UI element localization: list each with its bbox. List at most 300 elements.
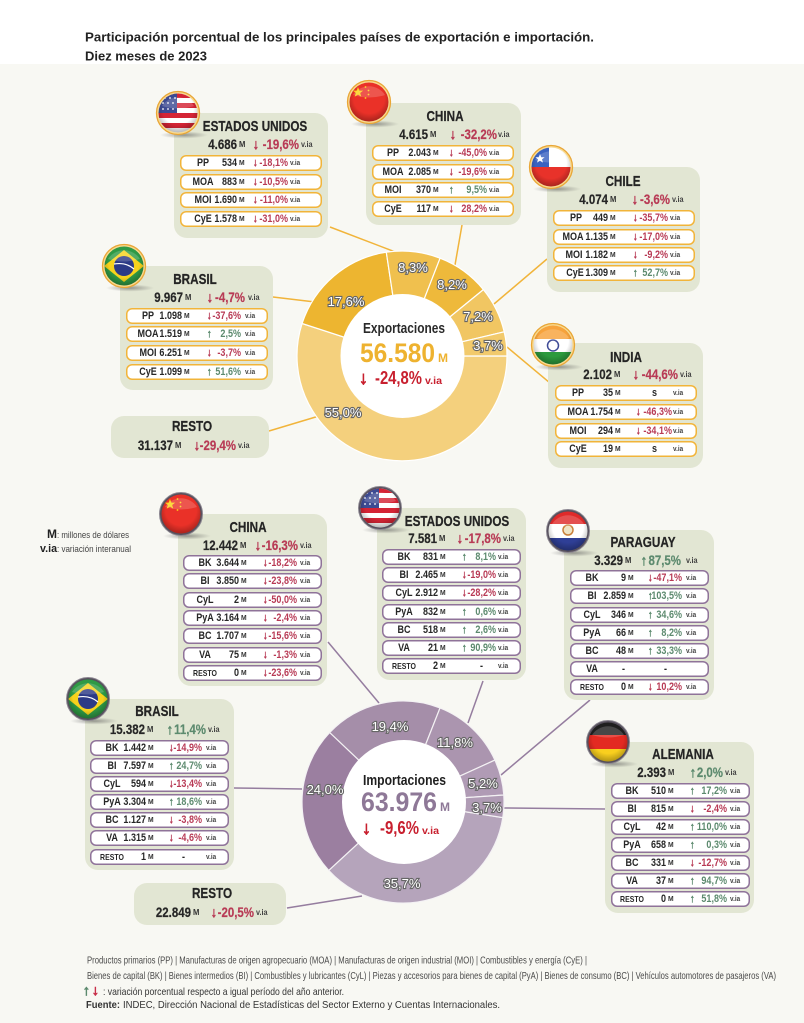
panel: imports China: 3.850 [216, 575, 239, 587]
panel: imports Alemania: ALEMANIA [652, 746, 714, 763]
panel: imports Estados Unidos: M [440, 607, 445, 616]
panel: imports Alemania: v.ia [730, 804, 740, 813]
panel: exports China: ↓ [450, 126, 456, 142]
panel: exports Chile: M [610, 194, 616, 204]
panel: imports Paraguay: M [628, 591, 633, 600]
panel: imports Alemania: VA [626, 875, 638, 887]
panel: exports Chile: 1.182 [585, 249, 608, 261]
panel: imports China: VA [199, 649, 211, 661]
panel: exports Brasil: PP [142, 310, 154, 322]
footer notes [83, 954, 776, 1011]
panel: imports China: BK [198, 557, 212, 569]
panel: imports Estados Unidos: v.ia [498, 570, 508, 579]
footer notes: Productos primarios (PP) | Manufacturas de origen agropecuario (MOA) | Manufacturas de origen industrial (MOI) | Combustibles y energía (CyE) | [87, 954, 587, 966]
panel: imports Alemania: 815 [651, 803, 666, 815]
panel: exports China: 2.085 [408, 166, 431, 178]
legend: units: : millones de dólares [57, 530, 129, 541]
panel: imports Paraguay: M [628, 646, 633, 655]
panel: imports Paraguay: BC [585, 645, 599, 657]
panel: imports Paraguay: - [664, 663, 667, 675]
panel: imports Estados Unidos: 21 [428, 642, 438, 654]
panel: imports Alemania: 110,0% [697, 821, 727, 833]
panel: exports Estados Unidos: -31,0% [259, 213, 288, 225]
panel: exports Chile: ↓ [633, 212, 638, 224]
panel: imports Estados Unidos: M [440, 588, 445, 597]
panel: imports Brasil: M [148, 743, 153, 752]
donut chart: imports [302, 701, 504, 903]
panel: imports Paraguay: VA [586, 663, 598, 675]
panel: exports China: v.ia [489, 185, 499, 194]
panel: imports Alemania: v.ia [730, 876, 740, 885]
panel: imports China: -50,0% [268, 594, 297, 606]
panel: imports China: M [240, 668, 246, 677]
panel: imports Brasil: 18,6% [176, 796, 202, 808]
panel: imports China: BI [200, 575, 210, 587]
panel: exports Brasil: M [184, 292, 191, 302]
panel: imports Brasil: VA [106, 832, 118, 844]
panel: imports Paraguay: BK [585, 572, 599, 584]
panel: exports Chile: v.ia [670, 232, 680, 241]
panel: exports India: 2.102 [583, 366, 612, 382]
panel: imports Alemania: M [668, 876, 673, 885]
panel: imports Resto: v.ia [256, 907, 268, 917]
panel: imports Paraguay: PARAGUAY [610, 534, 676, 551]
icon: flag China (imports) [160, 492, 211, 540]
panel: imports Brasil: -14,9% [173, 742, 202, 754]
panel: imports Estados Unidos: 2.912 [415, 587, 438, 599]
panel: exports Chile: -3,6% [640, 191, 670, 207]
panel: imports Resto: -20,5% [218, 904, 254, 920]
panel: exports China: -45,0% [458, 147, 487, 159]
panel: imports Estados Unidos: BK [397, 551, 411, 563]
panel: exports Estados Unidos: M [238, 177, 244, 186]
imports centre label: M [440, 800, 450, 814]
panel: exports Estados Unidos: v.ia [290, 214, 300, 223]
panel: imports Brasil: 1.315 [123, 832, 146, 844]
icon: flag Chile [530, 146, 581, 192]
panel: imports Brasil: 594 [131, 778, 146, 790]
panel: imports China: M [240, 540, 246, 550]
panel: imports Paraguay: ↑ [648, 609, 653, 621]
panel: exports Chile: M [610, 213, 615, 222]
panel: imports Paraguay: - [622, 663, 625, 675]
panel: imports Estados Unidos: v.ia [503, 533, 515, 543]
panel: exports Estados Unidos: 4.686 [208, 136, 237, 152]
panel: imports China: 3.164 [216, 612, 239, 624]
panel: exports Brasil: ↓ [207, 310, 212, 322]
icon: flag India [532, 324, 583, 370]
exports centre label: -24,8% [375, 368, 422, 388]
panel: exports Chile [547, 167, 700, 292]
panel: imports Brasil: 1.442 [123, 742, 146, 754]
panel: imports Paraguay: v.ia [686, 646, 696, 655]
panel: imports Alemania: M [668, 786, 673, 795]
title: Diez meses de 2023 [85, 48, 207, 64]
panel: imports China: ↓ [263, 649, 268, 661]
panel: imports Estados Unidos: 518 [423, 624, 438, 636]
panel: imports Paraguay: ↑ [648, 627, 653, 639]
panel: imports Brasil: ↓ [169, 778, 174, 790]
panel: exports India: 1.754 [590, 406, 613, 418]
panel: imports China: ↓ [263, 667, 268, 679]
panel: exports Chile: v.ia [670, 213, 680, 222]
panel: exports China: M [432, 148, 438, 157]
panel: exports Chile: 4.074 [579, 191, 608, 207]
panel: exports Brasil: MOI [139, 347, 157, 359]
panel: exports Estados Unidos: v.ia [290, 195, 300, 204]
panel: imports Paraguay: 66 [616, 627, 626, 639]
icon: flag Brasil (exports) [102, 244, 154, 292]
panel: imports Brasil: ↑ [169, 796, 174, 808]
panel: imports Alemania: v.ia [730, 822, 740, 831]
panel: imports Estados Unidos: VA [398, 642, 410, 654]
panel: exports Brasil: 51,6% [215, 366, 241, 378]
panel: imports Alemania: 2,0% [697, 764, 723, 780]
panel: exports India: v.ia [673, 426, 683, 435]
panel: imports Alemania: 94,7% [701, 875, 727, 887]
panel: exports Brasil: -37,6% [212, 310, 241, 322]
panel: imports Brasil: -4,6% [178, 832, 202, 844]
panel: imports Alemania: ↑ [690, 839, 695, 851]
panel: imports Estados Unidos: ↓ [462, 587, 467, 599]
panel: exports Brasil: v.ia [245, 311, 255, 320]
panel: exports Chile: -9,2% [644, 249, 668, 261]
panel: imports Estados Unidos: - [480, 660, 483, 672]
panel: exports China: 4.615 [399, 126, 428, 142]
donut chart: exports: 17,6% [328, 294, 365, 309]
panel: imports Alemania: 0 [661, 893, 666, 905]
imports centre label: Importaciones [363, 772, 446, 789]
donut chart: imports: 5,2% [468, 776, 498, 791]
panel: imports Paraguay: 87,5% [648, 552, 681, 568]
panel: exports China: MOI [384, 184, 402, 196]
panel: imports Estados Unidos: M [440, 570, 445, 579]
panel: imports China: PyA [196, 612, 214, 624]
panel: exports Estados Unidos: v.ia [290, 177, 300, 186]
panel: imports Brasil: PyA [103, 796, 121, 808]
panel: exports China: M [432, 204, 438, 213]
panel: imports Brasil [85, 699, 234, 870]
panel: exports China: v.ia [489, 167, 499, 176]
panel: exports Estados Unidos: MOA [192, 176, 214, 188]
panel: imports China: v.ia [300, 668, 310, 677]
panel: imports Alemania: BI [627, 803, 637, 815]
panel: imports Brasil: M [148, 797, 153, 806]
panel: imports Paraguay: 8,2% [661, 627, 682, 639]
panel: imports China: -2,4% [273, 612, 297, 624]
panel: exports India: s [652, 443, 657, 455]
footer notes: INDEC, Dirección Nacional de Estadísticas del Sector Externo y Cuentas Internacionales. [123, 1000, 500, 1011]
panel: exports Estados Unidos: v.ia [301, 139, 313, 149]
panel: imports Estados Unidos: ↓ [457, 530, 463, 546]
panel: imports Brasil: M [146, 724, 153, 734]
panel: exports Chile: v.ia [670, 250, 680, 259]
panel: imports Estados Unidos: ↑ [462, 624, 467, 636]
panel: imports Estados Unidos: RESTO [392, 661, 416, 671]
panel: exports India: INDIA [610, 349, 642, 366]
panel: exports China: M [430, 129, 436, 139]
panel: exports India: ↓ [636, 425, 641, 437]
panel: imports Paraguay: 33,3% [656, 645, 682, 657]
panel: imports China: ↓ [263, 557, 268, 569]
panel: imports Estados Unidos: v.ia [498, 625, 508, 634]
panel: exports India: v.ia [673, 407, 683, 416]
panel: imports Alemania: M [668, 822, 673, 831]
panel: imports Resto: ↓ [211, 904, 217, 920]
panel: imports Alemania: 37 [656, 875, 666, 887]
panel: exports Chile: MOI [565, 249, 583, 261]
panel: exports China: PP [387, 147, 399, 159]
panel: exports Brasil: 9.967 [154, 289, 183, 305]
panel: imports Estados Unidos: 831 [423, 551, 438, 563]
panel: imports Paraguay: 346 [611, 609, 626, 621]
panel: exports India: M [614, 444, 620, 453]
panel: exports Brasil: v.ia [245, 329, 255, 338]
icon: flag USA (exports) [156, 92, 208, 138]
panel: exports China: v.ia [489, 148, 499, 157]
panel: imports Paraguay: M [624, 555, 631, 565]
panel: exports Estados Unidos: -10,5% [259, 176, 288, 188]
panel: exports India: MOA [567, 406, 589, 418]
panel: imports China: -18,2% [268, 557, 297, 569]
panel: exports Chile: M [610, 250, 615, 259]
panel: exports Resto: M [174, 440, 181, 450]
panel: imports Brasil: M [148, 815, 153, 824]
panel: exports China [366, 103, 521, 225]
panel: exports China: ↓ [449, 203, 454, 215]
panel: exports Brasil: M [184, 329, 189, 338]
panel: exports Estados Unidos: PP [197, 157, 209, 169]
panel: exports Chile: -35,7% [639, 212, 668, 224]
panel: exports India: v.ia [673, 388, 683, 397]
imports centre label: -9,6% [380, 818, 419, 838]
panel: imports Brasil: ↓ [169, 814, 174, 826]
panel: imports Estados Unidos: ↑ [462, 551, 467, 563]
panel: imports Alemania: ↓ [690, 857, 695, 869]
panel: exports India: M [614, 369, 620, 379]
panel: exports Brasil: 1.099 [159, 366, 182, 378]
panel: exports Chile: ↓ [633, 249, 638, 261]
panel: exports Chile: MOA [562, 231, 584, 243]
panel: exports India: M [614, 388, 620, 397]
panel: imports Alemania: BK [625, 785, 639, 797]
panel: imports Paraguay: ↑ [641, 552, 647, 568]
imports centre label: ↓ [362, 818, 371, 838]
panel: exports Estados Unidos: 1.578 [214, 213, 237, 225]
panel: imports Estados Unidos: 832 [423, 606, 438, 618]
donut chart: exports: 3,7% [473, 338, 503, 353]
panel: exports Resto: ↓ [194, 437, 200, 453]
panel: imports Paraguay: M [628, 573, 633, 582]
panel: exports Brasil: ↓ [207, 347, 212, 359]
panel: exports Brasil: -4,7% [215, 289, 245, 305]
panel: imports China: M [240, 650, 246, 659]
panel: imports Estados Unidos: 2.465 [415, 569, 438, 581]
panel: imports Paraguay: CyL [583, 609, 601, 621]
panel: imports Paraguay: 34,6% [656, 609, 682, 621]
panel: exports Chile: ↓ [633, 231, 638, 243]
panel: imports China [178, 514, 327, 686]
panel: imports Estados Unidos: M [438, 533, 445, 543]
panel: imports China: ↓ [263, 575, 268, 587]
panel: exports Estados Unidos: v.ia [290, 158, 300, 167]
panel: exports Chile: -17,0% [639, 231, 668, 243]
panel: exports China: ↓ [449, 166, 454, 178]
connector lines: imports [234, 642, 605, 908]
exports centre label: ↓ [359, 368, 368, 388]
icon: flag USA (imports) [358, 486, 410, 534]
panel: imports Estados Unidos: v.ia [498, 607, 508, 616]
panel: imports Paraguay: ↓ [648, 681, 653, 693]
panel: exports Brasil: 1.098 [159, 310, 182, 322]
panel: imports China: ↓ [255, 537, 261, 553]
panel: exports Resto [111, 416, 269, 458]
panel: exports India: -44,6% [642, 366, 678, 382]
panel: imports Estados Unidos: M [440, 625, 445, 634]
panel: imports China: ↓ [263, 612, 268, 624]
panel: imports Alemania: 51,8% [701, 893, 727, 905]
panel: imports China: M [240, 576, 246, 585]
panel: exports China: M [432, 185, 438, 194]
panel: exports Chile: CyE [566, 267, 584, 279]
donut chart: imports: 19,4% [372, 719, 409, 734]
panel: imports Paraguay: v.ia [686, 628, 696, 637]
panel: imports China: 3.644 [216, 557, 239, 569]
panel: imports China: -15,6% [268, 630, 297, 642]
panel: imports Brasil: 15.382 [110, 721, 145, 737]
panel: imports Paraguay: 103,5% [651, 590, 682, 602]
panel: exports Estados Unidos: M [238, 139, 245, 149]
panel: imports Brasil: v.ia [206, 833, 216, 842]
panel: exports China: MOA [382, 166, 404, 178]
donut chart: exports: 55,0% [325, 405, 362, 420]
donut chart: exports: 8,3% [398, 260, 428, 275]
panel: exports Brasil: 1.519 [159, 328, 182, 340]
title: Participación porcentual de los principales países de exportación e importación. [85, 30, 594, 44]
panel: imports Alemania: -12,7% [698, 857, 727, 869]
panel: exports India: -46,3% [643, 406, 672, 418]
panel: imports China: M [240, 595, 246, 604]
panel: imports China: v.ia [300, 576, 310, 585]
panel: imports Alemania: 2.393 [637, 764, 666, 780]
donut chart: exports: 7,2% [463, 309, 493, 324]
panel: imports Paraguay: 0 [621, 681, 626, 693]
panel: exports Brasil: ↓ [207, 289, 213, 305]
panel: imports Brasil: v.ia [206, 779, 216, 788]
panel: exports India: PP [572, 387, 584, 399]
panel: imports Brasil: 1.127 [123, 814, 146, 826]
panel: exports Estados Unidos: M [238, 158, 244, 167]
legend: units: v.ia [40, 543, 58, 555]
panel: exports Chile: 1.135 [585, 231, 608, 243]
panel: imports Paraguay: 3.329 [594, 552, 623, 568]
panel: exports Brasil: MOA [137, 328, 159, 340]
panel: imports Alemania: M [668, 894, 673, 903]
panel: imports Brasil: v.ia [208, 724, 220, 734]
footer notes: ↑ [83, 982, 90, 998]
panel: imports China: v.ia [300, 595, 310, 604]
panel: imports China: CHINA [229, 519, 267, 536]
panel: imports Resto: M [192, 907, 199, 917]
panel: exports Estados Unidos: ↓ [253, 213, 258, 225]
panel: exports China: M [432, 167, 438, 176]
panel: imports China: -1,3% [273, 649, 297, 661]
panel: imports Estados Unidos: M [440, 643, 445, 652]
panel: exports Brasil: -3,7% [217, 347, 241, 359]
panel: imports Brasil: M [148, 852, 153, 861]
panel: exports Estados Unidos: ↓ [253, 194, 258, 206]
panel: imports China: M [240, 631, 246, 640]
panel: imports Alemania: 331 [651, 857, 666, 869]
panel: imports Estados Unidos: -17,8% [465, 530, 501, 546]
panel: exports Estados Unidos: -19,6% [263, 136, 299, 152]
panel: imports Brasil: M [148, 761, 153, 770]
panel: imports Estados Unidos: ↑ [462, 642, 467, 654]
panel: imports Paraguay: v.ia [686, 573, 696, 582]
panel: imports Brasil: v.ia [206, 797, 216, 806]
panel: imports Estados Unidos: ↓ [462, 569, 467, 581]
panel: imports China: RESTO [193, 668, 217, 678]
connector lines: exports [269, 225, 550, 431]
panel: exports India: CyE [569, 443, 587, 455]
panel: imports Estados Unidos: -28,2% [467, 587, 496, 599]
panel: imports Paraguay: PyA [583, 627, 601, 639]
panel: imports China: 2 [234, 594, 239, 606]
panel: imports Estados Unidos: PyA [395, 606, 413, 618]
panel: exports Resto: v.ia [238, 440, 250, 450]
imports centre label [361, 772, 450, 838]
imports centre label: 63.976 [361, 787, 437, 817]
panel: imports Alemania: v.ia [730, 786, 740, 795]
panel: imports China: -23,6% [268, 667, 297, 679]
legend: units [40, 527, 131, 555]
panel: imports Brasil: BC [105, 814, 119, 826]
panel: exports China: 28,2% [461, 203, 487, 215]
panel: exports India: M [614, 407, 620, 416]
panel: exports Chile: M [610, 268, 615, 277]
panel: exports Estados Unidos: 883 [222, 176, 237, 188]
exports centre label: v.ia [425, 375, 442, 387]
exports centre label: 56.580 [360, 338, 435, 368]
panel: imports China: v.ia [300, 558, 310, 567]
panel: exports Estados Unidos: M [238, 195, 244, 204]
panel: exports Resto: -29,4% [200, 437, 236, 453]
title [85, 30, 594, 64]
panel: imports Paraguay: RESTO [580, 682, 604, 692]
panel: imports China: M [240, 613, 246, 622]
panel: imports Paraguay: 48 [616, 645, 626, 657]
panel: imports Alemania: 510 [651, 785, 666, 797]
panel: imports Estados Unidos: 7.581 [408, 530, 437, 546]
donut chart: exports [297, 251, 507, 461]
icon: flag Paraguay [546, 510, 598, 556]
panel: imports Alemania: 17,2% [701, 785, 727, 797]
panel: exports Chile: 1.309 [585, 267, 608, 279]
panel: imports China: 12.442 [203, 537, 238, 553]
panel: imports Brasil: 11,4% [174, 721, 206, 737]
exports centre label: M [438, 351, 448, 365]
panel: exports Chile: CHILE [605, 173, 641, 190]
donut chart: imports: 24,0% [307, 782, 344, 797]
panel: exports India [548, 343, 703, 468]
panel: exports Estados Unidos: -18,1% [259, 157, 288, 169]
panel: imports Resto: RESTO [192, 885, 232, 902]
panel: imports Paraguay: M [628, 610, 633, 619]
panel: exports India: s [652, 387, 657, 399]
panel: exports Estados Unidos: CyE [194, 213, 212, 225]
panel: imports Paraguay: 10,2% [656, 681, 682, 693]
panel: exports China: -32,2% [461, 126, 497, 142]
